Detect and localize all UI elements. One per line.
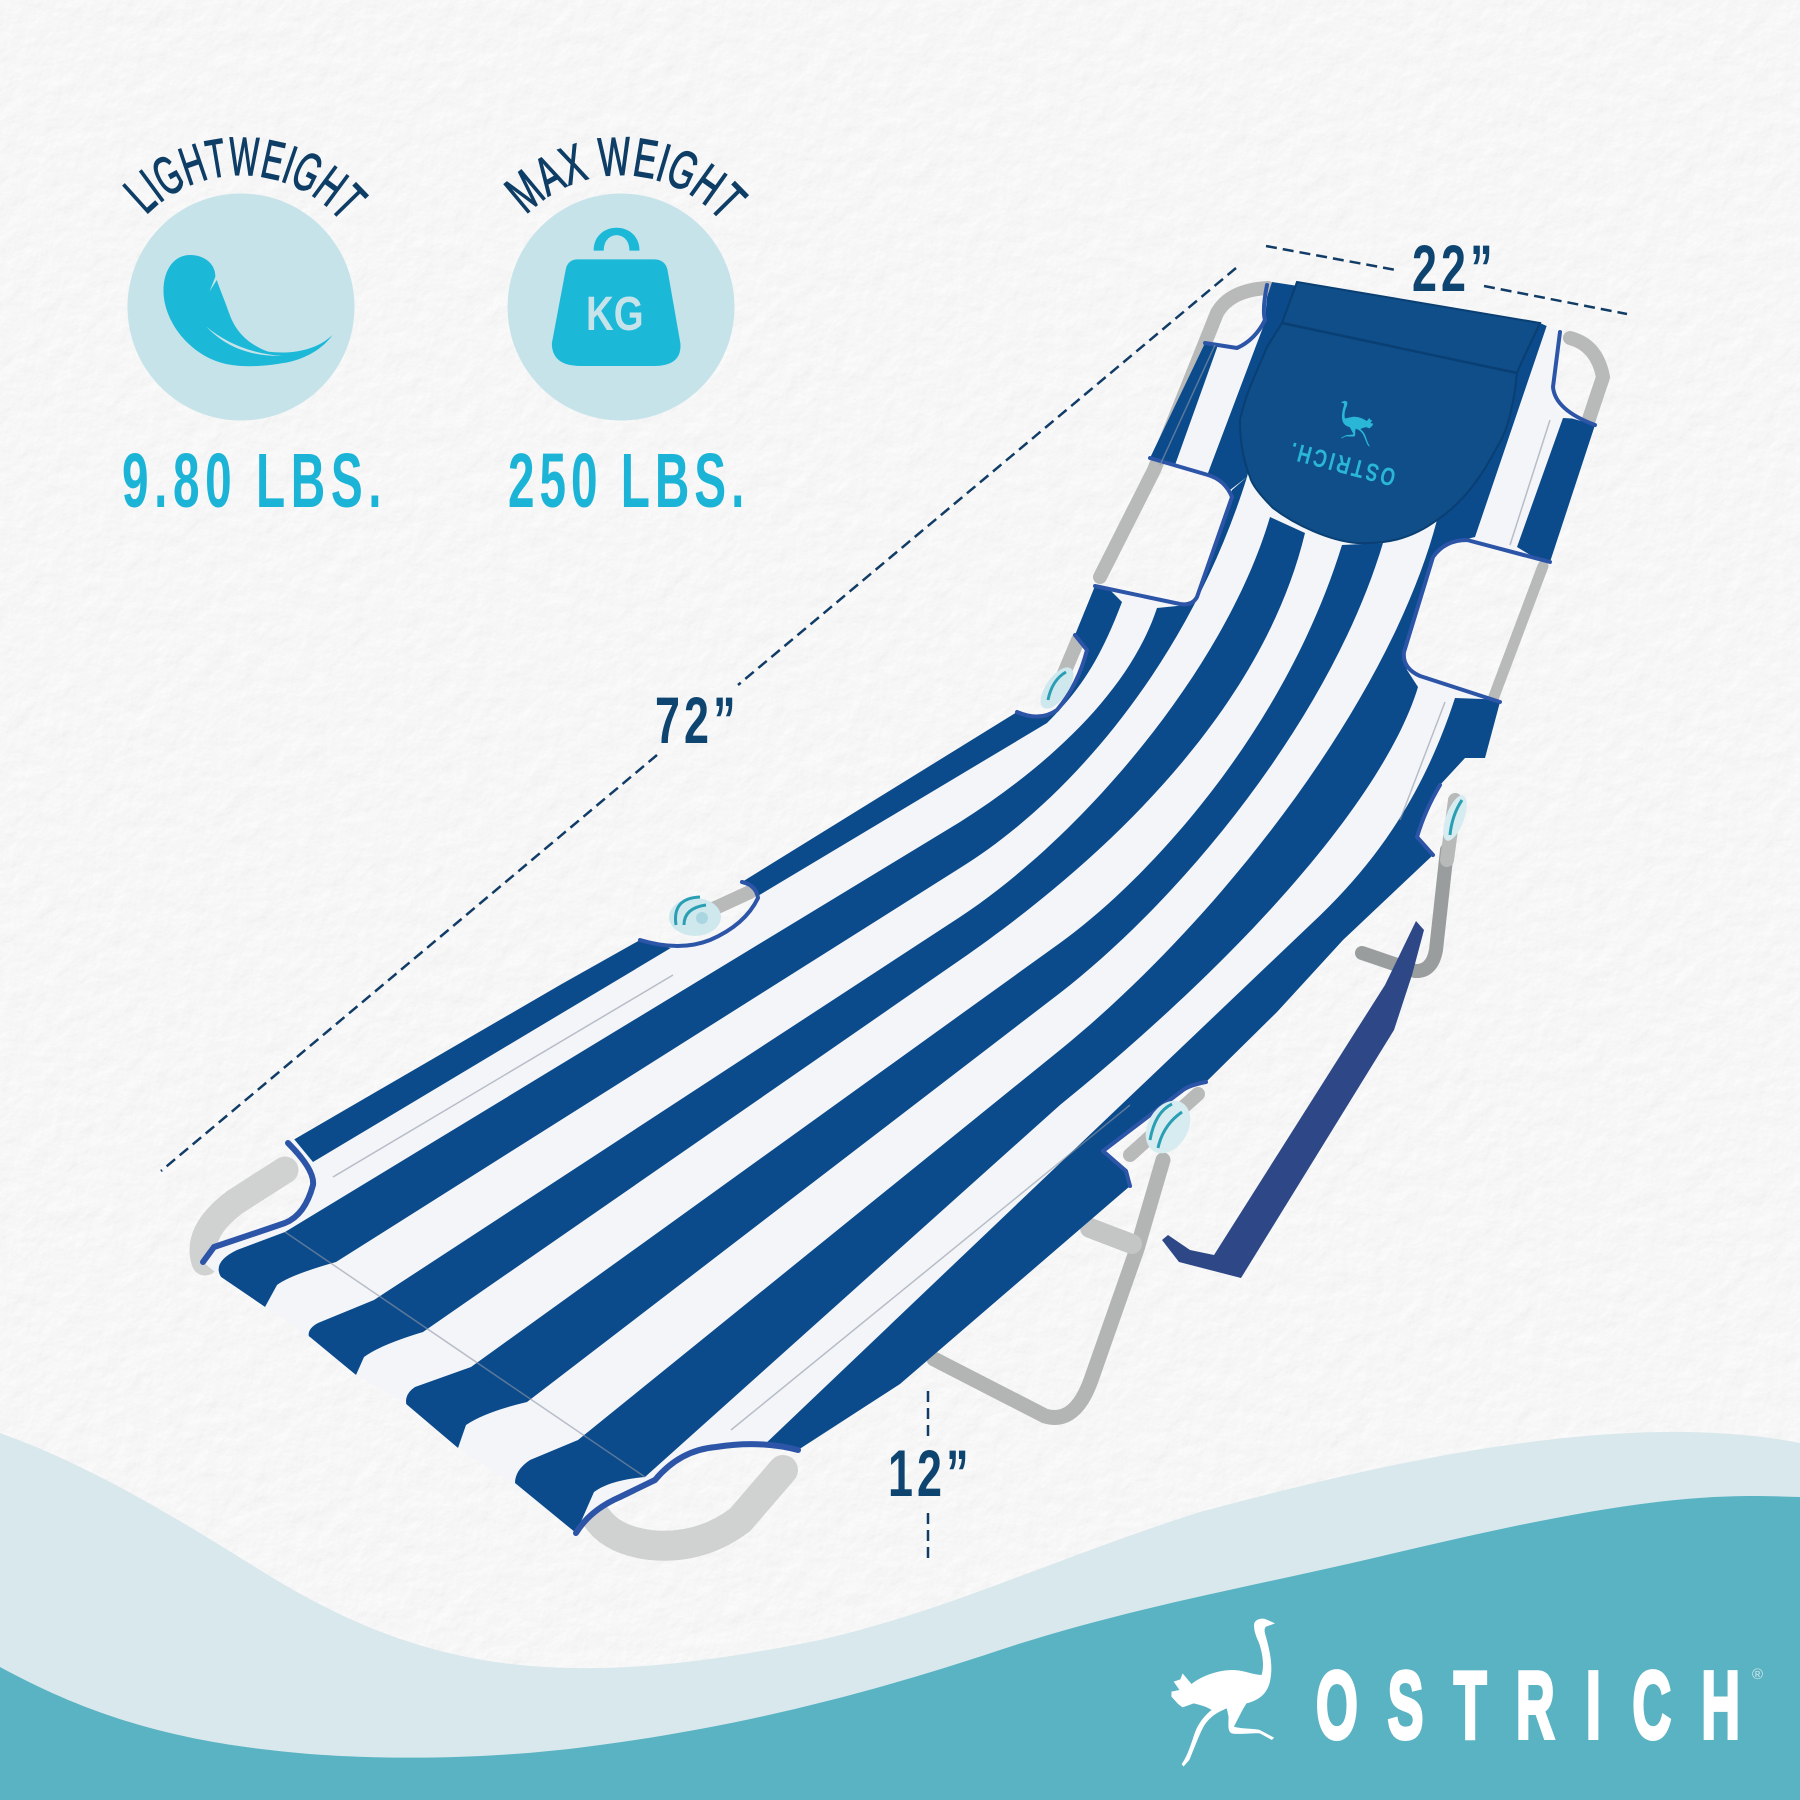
right band <box>762 698 1510 1460</box>
hinge tubes <box>700 640 1455 1155</box>
stripe 3 <box>406 543 1383 1448</box>
front leg strut <box>1090 1228 1132 1244</box>
width label: 22” <box>1412 231 1497 305</box>
foot hems <box>203 1143 798 1533</box>
hinges <box>669 662 1472 1161</box>
fabric hems <box>203 285 1595 1533</box>
fabric stripes <box>219 280 1600 1533</box>
pillow logo text: OSTRICH. <box>1284 436 1398 492</box>
foot tube right <box>597 1470 783 1546</box>
lightweight value: 9.80 LBS. <box>122 437 387 524</box>
icon: kettle weight <box>552 231 680 366</box>
max weight value: 250 LBS. <box>508 437 749 524</box>
right flap stripe <box>1517 418 1594 560</box>
strap <box>1162 921 1424 1278</box>
fabric base <box>203 282 1595 1533</box>
fabric stitching <box>285 345 1550 1477</box>
brand logo <box>1171 1619 1763 1767</box>
panel: lightweight spec <box>122 137 387 524</box>
right side tube <box>1493 566 1543 699</box>
icon: feather <box>163 255 332 366</box>
dimension: height line <box>927 1391 929 1563</box>
hinge right lower <box>1137 1093 1199 1161</box>
foot tube left <box>203 1170 285 1262</box>
stripe 4 <box>515 320 1547 1533</box>
hinge right upper <box>1438 792 1472 844</box>
hinge hems <box>640 635 1440 1186</box>
panel: max weight spec <box>503 136 749 524</box>
stripe 1 <box>219 477 1247 1307</box>
light wave <box>0 1432 1800 1800</box>
pillow side stripe <box>1208 280 1300 490</box>
chair fabric <box>203 280 1600 1533</box>
max weight arc heading: MAX WEIGHT <box>503 136 749 216</box>
headrest pillow <box>1240 282 1540 543</box>
lightweight arc heading: LIGHTWEIGHT <box>122 137 369 217</box>
front leg tube <box>934 1160 1163 1418</box>
registered mark: ® <box>1752 1666 1763 1683</box>
icon: kettle weight: KG <box>586 288 644 341</box>
stripe 2 <box>309 517 1305 1375</box>
pillow fold <box>1282 323 1517 373</box>
chair frame and strap behind fabric <box>203 288 1603 1546</box>
icon: pillow ostrich <box>1341 401 1373 447</box>
rear leg tube <box>1362 850 1447 971</box>
dimension: width line <box>1266 246 1627 314</box>
length label: 72” <box>655 683 740 757</box>
height label: 12” <box>888 1436 973 1510</box>
icon: ostrich <box>1171 1619 1275 1767</box>
left band <box>270 575 1122 1162</box>
teal wave <box>0 1496 1800 1800</box>
hinge left lower <box>669 897 721 936</box>
dimension: length line <box>161 268 1236 1171</box>
pillow shape <box>1240 282 1540 543</box>
upper hems <box>1095 285 1595 702</box>
upper frame tube <box>1100 288 1603 577</box>
hinge left upper <box>1034 662 1080 714</box>
left flap stripe <box>1150 344 1218 464</box>
lightweight circle <box>128 194 354 420</box>
logo wordmark: OSTRICH <box>1316 1653 1740 1759</box>
max weight circle <box>508 194 734 420</box>
